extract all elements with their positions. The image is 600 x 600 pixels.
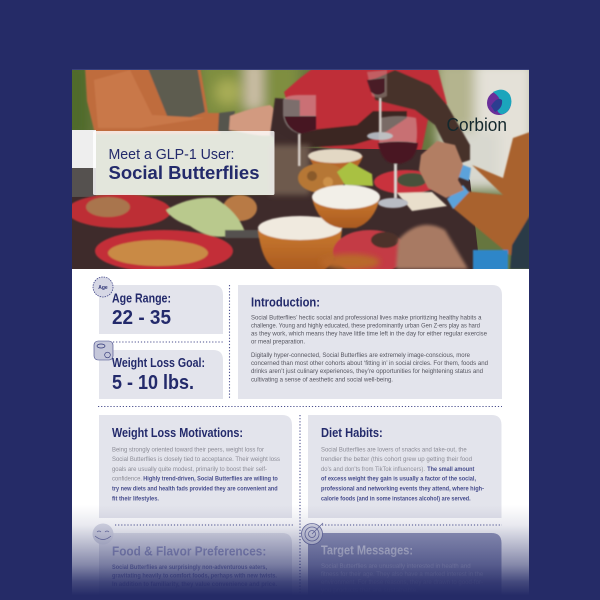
blurred foreground food (320, 254, 380, 270)
weight heading: Weight Loss Goal: (112, 355, 205, 370)
food text: gravitating heavily to comfort foods, perhaps with new twists. (112, 572, 277, 580)
introduction paragraph one: or meal preparation. (251, 339, 305, 346)
target text: Social Butterflies are unusually interested in health and (321, 563, 471, 570)
table (72, 130, 480, 269)
panel: food and flavor preferences (99, 533, 292, 600)
centre bowl (258, 230, 342, 272)
white page sheet (72, 69, 529, 600)
hero photo: friends sharing a meal (72, 69, 529, 269)
icon: age badge: Age (98, 285, 108, 291)
panel: introduction (238, 285, 502, 399)
title box (93, 131, 274, 195)
motivations heading: Weight Loss Motivations: (112, 425, 243, 440)
introduction paragraph two (251, 352, 488, 384)
motivations text: Being strongly oriented toward their peers, weight loss for (112, 446, 264, 454)
diet text: Social Butterflies are lovers of snacks and take-out, the (321, 446, 467, 454)
logo wordmark: Corbion (446, 115, 507, 135)
red-shirted diner (270, 66, 470, 165)
left diner's jacket (85, 66, 280, 136)
target text (321, 563, 484, 594)
introduction paragraph one: challenge. Young and highly educated, these predominantly urban Gen Z-ers play as hard (251, 322, 480, 330)
left plates and food (67, 194, 171, 228)
panel: age range (99, 285, 223, 334)
age value: 22 - 35 (112, 307, 171, 329)
food text (112, 564, 277, 588)
diet text: professional and networking events they attend, where high- (321, 486, 484, 492)
introduction paragraph one: Social Butterflies’ hectic social and professional lives make prioritizing healthy habits a (251, 314, 482, 321)
title: Social Butterflies (108, 163, 260, 183)
food platter (298, 163, 346, 193)
back bowl (310, 156, 364, 170)
introduction paragraph two: drinks aren’t just culinary experiences, they’re opportunities for heightening status and (251, 368, 483, 375)
bottom fade overlay (0, 505, 600, 600)
diet text: The small amount (427, 466, 475, 473)
motivations text: try new diets and health fads provided they are convenient and (112, 486, 278, 492)
diet text: do’s and don’ts from TikTok influencers). (321, 466, 425, 473)
food text: In addition to familiarity, they value convenience and price. (112, 581, 277, 588)
introduction heading: Introduction: (251, 295, 320, 310)
eyebrow: Meet a GLP-1 User: (108, 147, 234, 163)
introduction paragraph one: as they work, which means they have little time left in the day for either regular exercise (251, 331, 487, 338)
introduction paragraph two: cultivating a sense of aesthetic and social well-being. (251, 376, 393, 384)
motivations text: Social Butterflies is closely tied to acceptance. Their weight loss (112, 456, 280, 463)
diet text: calorie foods (and in some instances alcohol) are served. (321, 495, 471, 502)
red plate (374, 170, 438, 194)
age heading: Age Range: (112, 291, 171, 306)
blurred foreground hand (396, 225, 468, 269)
glassware blur beside title (270, 145, 310, 195)
panel: weight loss motivations (99, 415, 292, 518)
logo mark (487, 90, 511, 115)
infographic page (72, 69, 529, 592)
diet text: trendier the better (this cohort grew up getting their food (321, 456, 472, 463)
motivations text (112, 446, 280, 502)
diet heading: Diet Habits: (321, 425, 383, 440)
panel: weight loss goal (99, 350, 223, 399)
food text: Social Butterflies are surprisingly non-adventurous eaters, (112, 564, 267, 571)
target text: fitness for their age. They also have a marked interest in the (321, 571, 484, 578)
motivations text: goals are usually quite modest, primarily to boost their self- (112, 466, 267, 473)
introduction paragraph two: Digitally hyper-connected, Social Butterflies are extremely image-conscious, more (251, 352, 470, 359)
motivations text: confidence. (112, 476, 142, 483)
bottom red plate (332, 229, 401, 269)
right diner's hands and jacket (419, 132, 530, 272)
target heading: Target Messages: (321, 542, 413, 557)
diet text: of excess weight they gain is usually a factor of the social, (321, 476, 476, 483)
introduction paragraph two: concerned than most other cohorts about ‘fitting in’ in social circles. For them, foods and (251, 360, 488, 367)
middle bowl (312, 198, 380, 228)
diet text (321, 446, 484, 502)
motivations text: fit their lifestyles. (112, 495, 159, 502)
Corbion logo (446, 90, 511, 135)
icon: target (302, 523, 323, 544)
food heading: Food & Flavor Preferences: (112, 544, 266, 559)
wine glasses (283, 70, 418, 208)
panel: target messages (308, 533, 502, 600)
lettuce and meat (223, 195, 257, 221)
icon: age badge (93, 277, 113, 297)
page top edge (72, 69, 529, 70)
motivations text: Highly trend-driven, Social Butterflies are willing to (143, 476, 278, 483)
weight value: 5 - 10 lbs. (112, 372, 194, 394)
icon: smiling face (92, 524, 114, 544)
introduction paragraph one (251, 314, 487, 346)
panel: diet habits (308, 415, 502, 518)
icon: bathroom scale (94, 341, 113, 360)
target text: environment. For these reasons, they are drawn to good-for- (321, 579, 483, 586)
target text: you products that are sustainable. (321, 587, 418, 594)
white chair and plaid sleeve (72, 130, 96, 168)
